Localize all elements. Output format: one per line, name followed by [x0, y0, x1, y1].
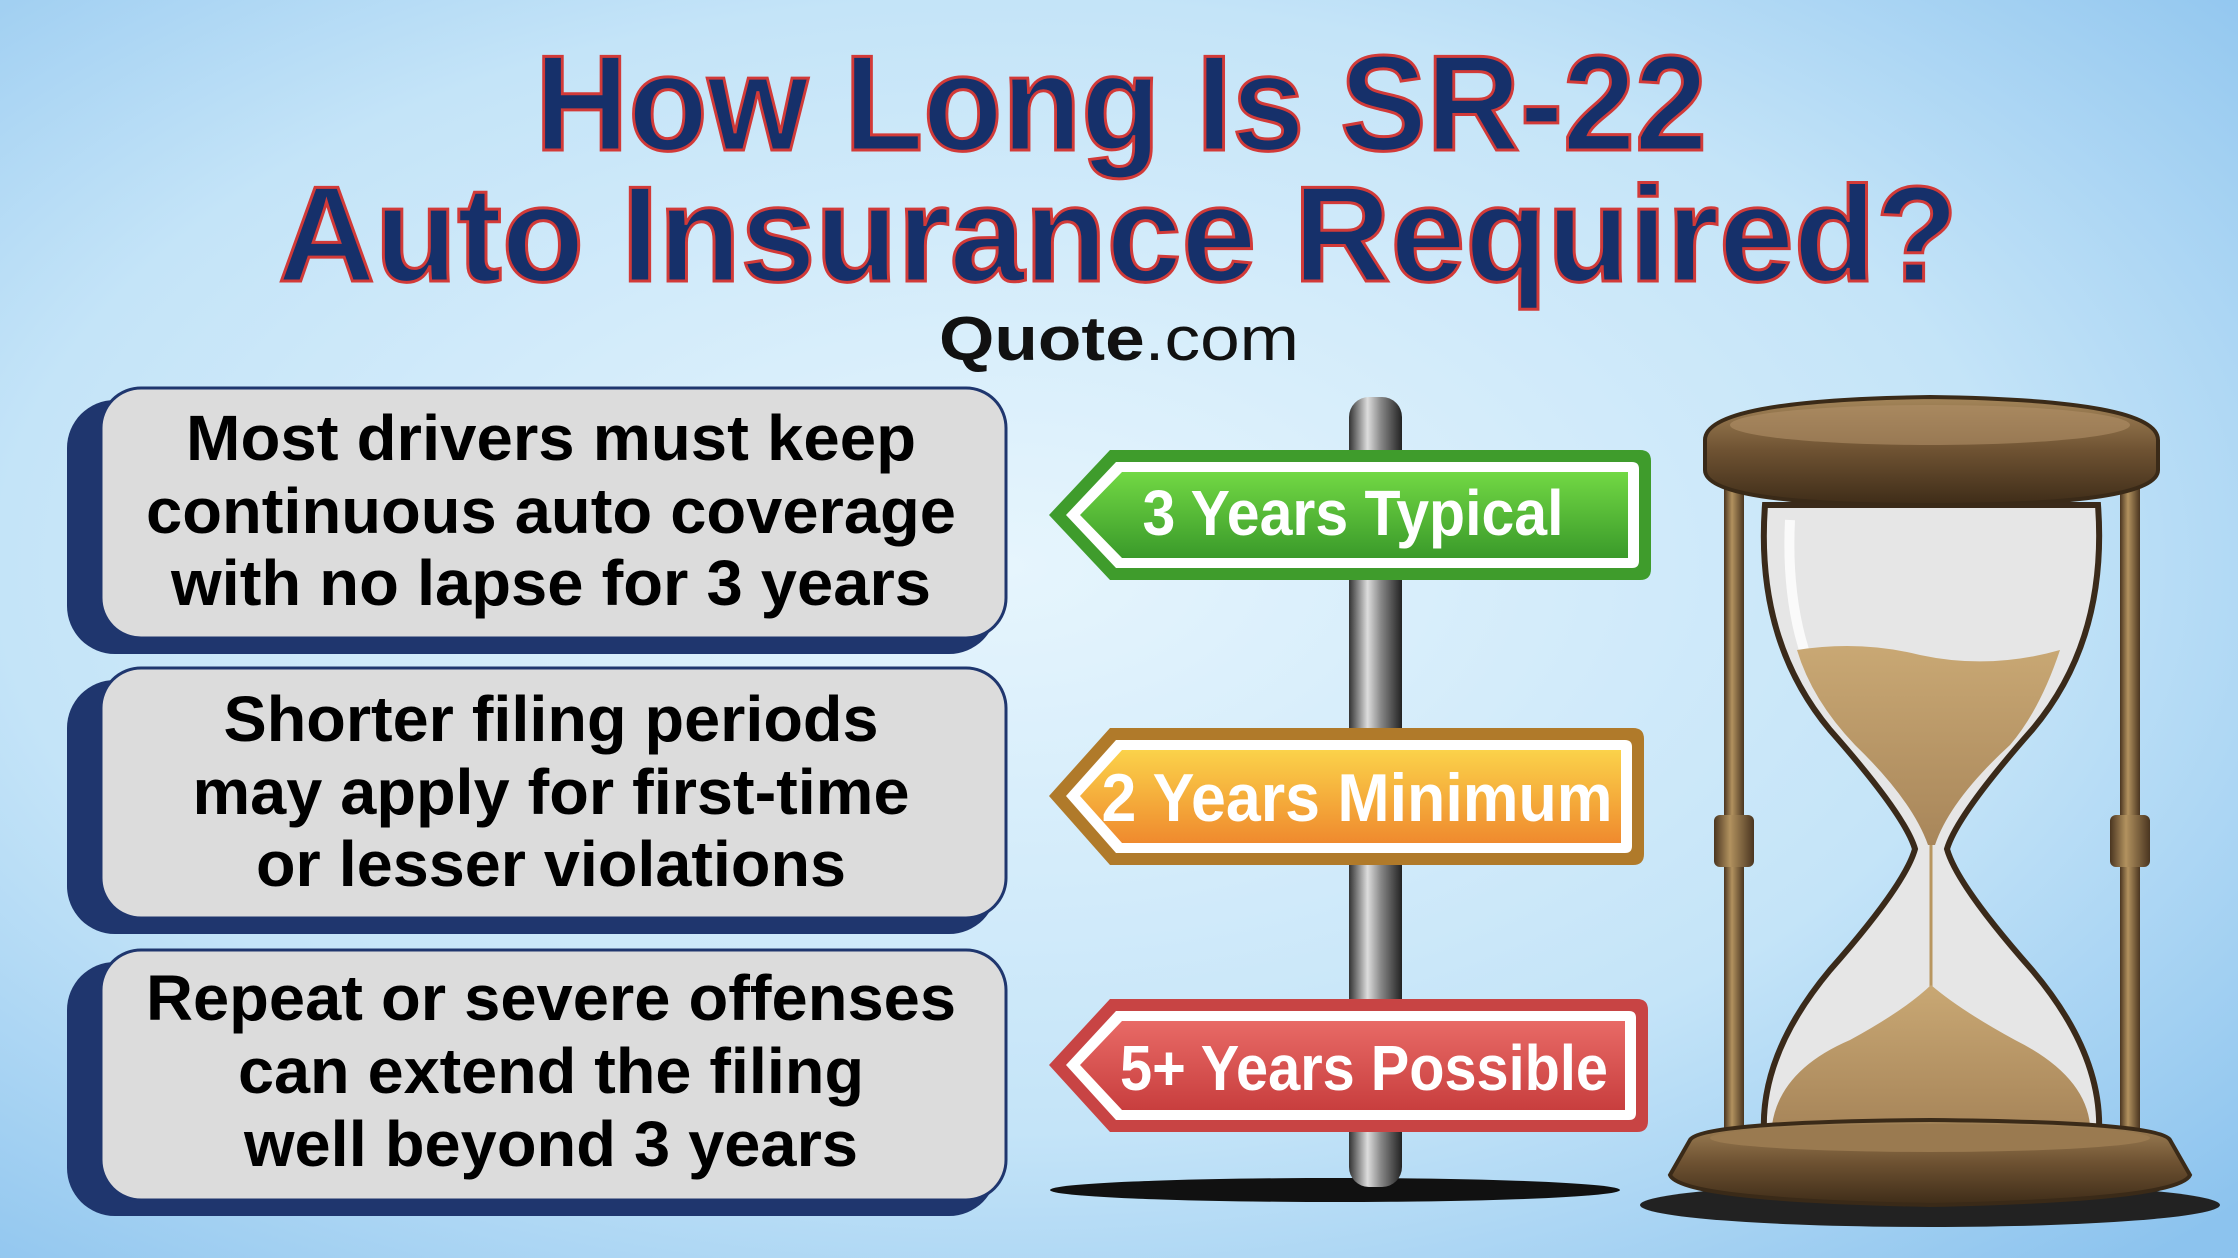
sign: 2 years minimum [1049, 728, 1644, 865]
panel: box 2: Shorter filing periods [224, 683, 878, 755]
panel: box 1 [67, 388, 1006, 654]
panel: box 2: may apply for first-time [192, 756, 910, 828]
sign: 2 years minimum: 2 Years Minimum [1102, 760, 1612, 836]
base [1670, 1120, 2190, 1205]
sign: 3 years typical [1049, 450, 1651, 580]
panel: box 1: Most drivers must keep [186, 402, 916, 474]
icon: hourglass [1640, 397, 2220, 1227]
sign: 5+ years possible: 5+ Years Possible [1120, 1032, 1608, 1104]
glass [1764, 505, 2099, 1145]
panel: box 3 [67, 950, 1006, 1216]
panel: box 2 [67, 668, 1006, 934]
panel: box 3: can extend the filing [238, 1035, 864, 1107]
panel: box 3: well beyond 3 years [243, 1108, 858, 1180]
title: Auto Insurance Required? [278, 158, 1958, 310]
sign: 5+ years possible [1049, 999, 1648, 1132]
top cap [1705, 397, 2158, 505]
logo: Quote.com: Quote .com [939, 305, 1299, 374]
panel: box 1: with no lapse for 3 years [170, 547, 931, 619]
signpost [1049, 397, 1651, 1202]
panel: box 3: Repeat or severe offenses [146, 962, 956, 1034]
sign: 3 years typical: 3 Years Typical [1142, 477, 1564, 549]
title [278, 27, 1958, 310]
pillars [1724, 480, 1744, 1140]
panel: box 1: continuous auto coverage [146, 475, 956, 547]
sand bottom [1772, 985, 2090, 1125]
sand top [1797, 646, 2060, 845]
panel: box 2: or lesser violations [256, 828, 846, 900]
title: How Long Is SR-22 [535, 27, 1707, 179]
